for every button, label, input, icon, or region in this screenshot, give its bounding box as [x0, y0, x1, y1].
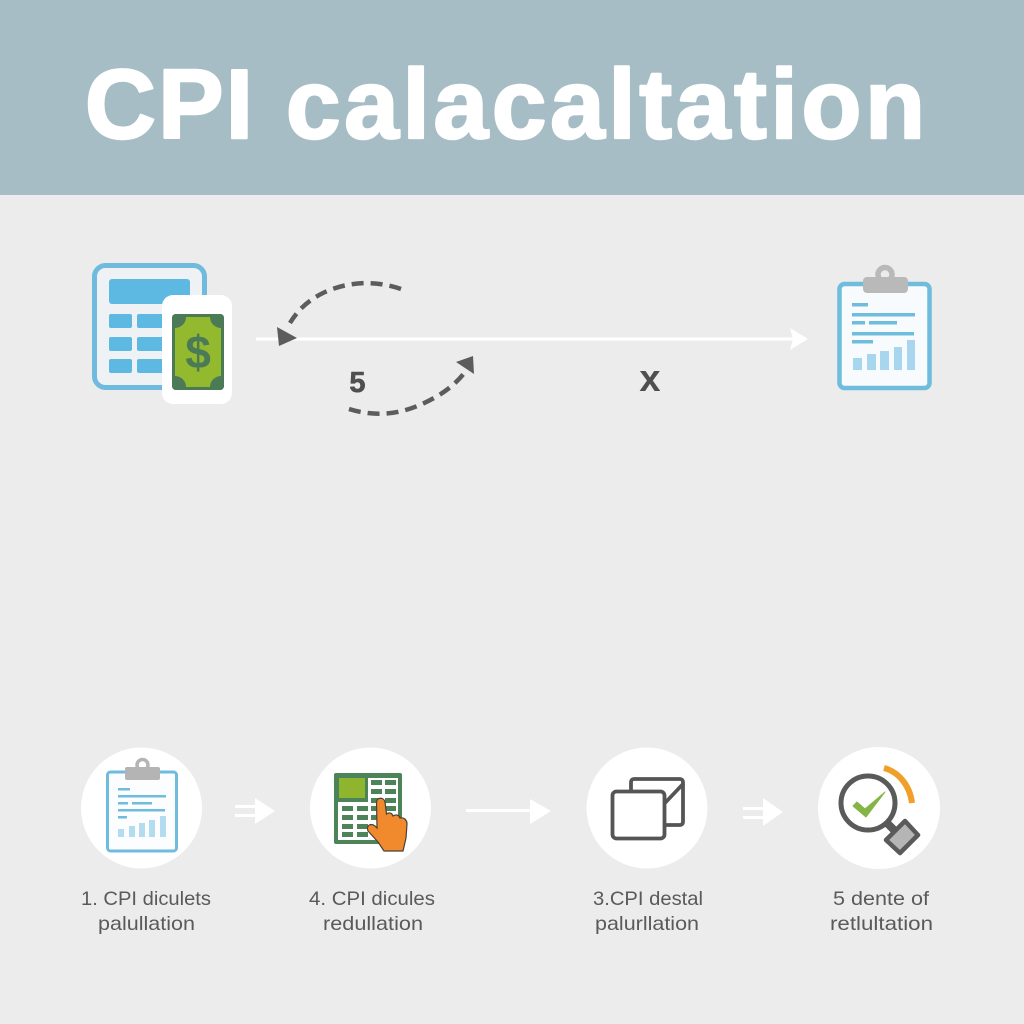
icon: large clipboard report [840, 268, 930, 388]
step 2 label: redullation [323, 913, 423, 935]
step 4 label: retlultation [830, 913, 933, 935]
step 1 label: palullation [98, 913, 195, 935]
arrow: main horizontal line [256, 328, 808, 350]
icon: green spreadsheet with hand [310, 748, 431, 868]
step 1 [81, 748, 211, 935]
header banner [0, 0, 1024, 195]
label: 5: 5 [349, 367, 366, 399]
icon: calculator with banknote: $ [185, 326, 211, 378]
step 3 [586, 748, 708, 935]
arrow: step 3 to 4 [743, 798, 783, 826]
arrow: dashed curve pointing right [349, 356, 474, 414]
icon: calculator with banknote [94, 266, 232, 404]
icon: clipboard in circle [81, 748, 202, 868]
step 4 [818, 747, 940, 935]
step 3 label: palurllation [595, 913, 699, 935]
arrow: step 2 to 3 [466, 799, 551, 824]
arrow: step 1 to 2 [235, 798, 275, 824]
step 1 label: 1. CPI diculets [81, 888, 211, 910]
arrow: dashed curve pointing left [277, 283, 401, 346]
label: x: x [639, 358, 661, 400]
step 2 [309, 748, 435, 935]
step 2 label: 4. CPI dicules [309, 888, 435, 910]
step 4 label: 5 dente of [833, 888, 930, 910]
icon: overlapping squares [586, 748, 708, 868]
title: calacaltation [286, 49, 925, 159]
title: CPI [85, 49, 253, 159]
step 3 label: 3.CPI destal [593, 888, 703, 910]
icon: magnifier with check [818, 747, 940, 869]
